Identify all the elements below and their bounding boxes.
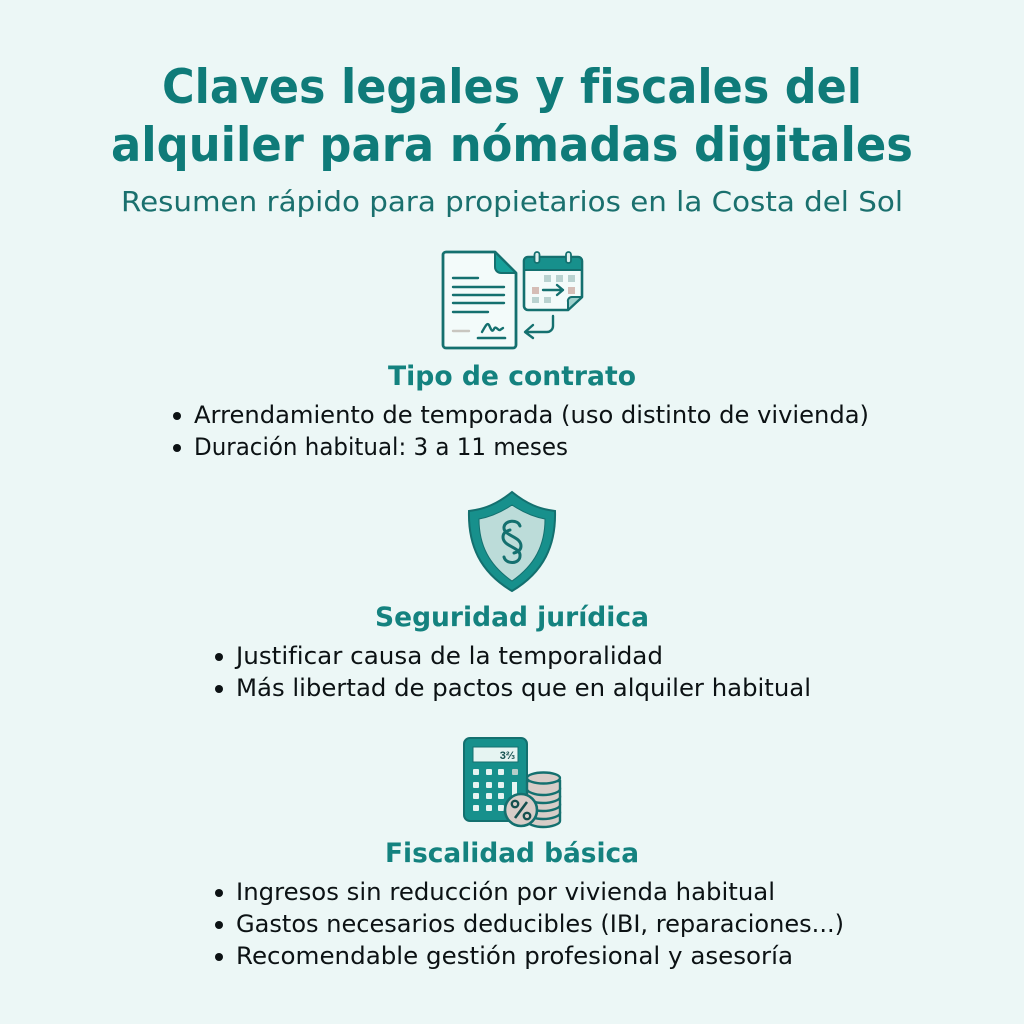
bullet list: fiscalidad básica: Gastos necesarios deducibles (IBI, reparaciones...) [236, 910, 844, 938]
bullet list: fiscalidad básica: Ingresos sin reducción por vivienda habitual [236, 878, 775, 906]
bullet list: fiscalidad básica [215, 878, 844, 970]
bullet list: tipo de contrato [173, 401, 869, 461]
bullet list: seguridad jurídica: Más libertad de pactos que en alquiler habitual [236, 674, 811, 702]
heading: seguridad jurídica: Seguridad jurídica [375, 602, 649, 633]
section: seguridad jurídica [215, 602, 811, 702]
title: Claves legales y fiscales del [162, 60, 862, 115]
section: tipo de contrato [173, 361, 869, 461]
bullet list: tipo de contrato: Arrendamiento de temporada (uso distinto de vivienda) [194, 401, 869, 429]
icon: contract and calendar [443, 252, 582, 348]
section: fiscalidad básica [215, 838, 844, 970]
icon: calculator and coins: 3⅔ [500, 750, 515, 762]
bullet list: fiscalidad básica: Recomendable gestión profesional y asesoría [236, 942, 793, 970]
icon: shield with section sign [469, 492, 555, 591]
subtitle: Resumen rápido para propietarios en la Costa del Sol [121, 185, 903, 218]
title [111, 60, 913, 173]
heading: tipo de contrato: Tipo de contrato [388, 361, 636, 392]
title: alquiler para nómadas digitales [111, 118, 913, 173]
bullet list: tipo de contrato: Duración habitual: 3 a 11 meses [194, 433, 568, 461]
heading: fiscalidad básica: Fiscalidad básica [385, 838, 639, 869]
bullet list: seguridad jurídica [215, 642, 811, 702]
icon: calculator and coins [464, 738, 560, 827]
bullet list: seguridad jurídica: Justificar causa de la temporalidad [234, 642, 663, 670]
